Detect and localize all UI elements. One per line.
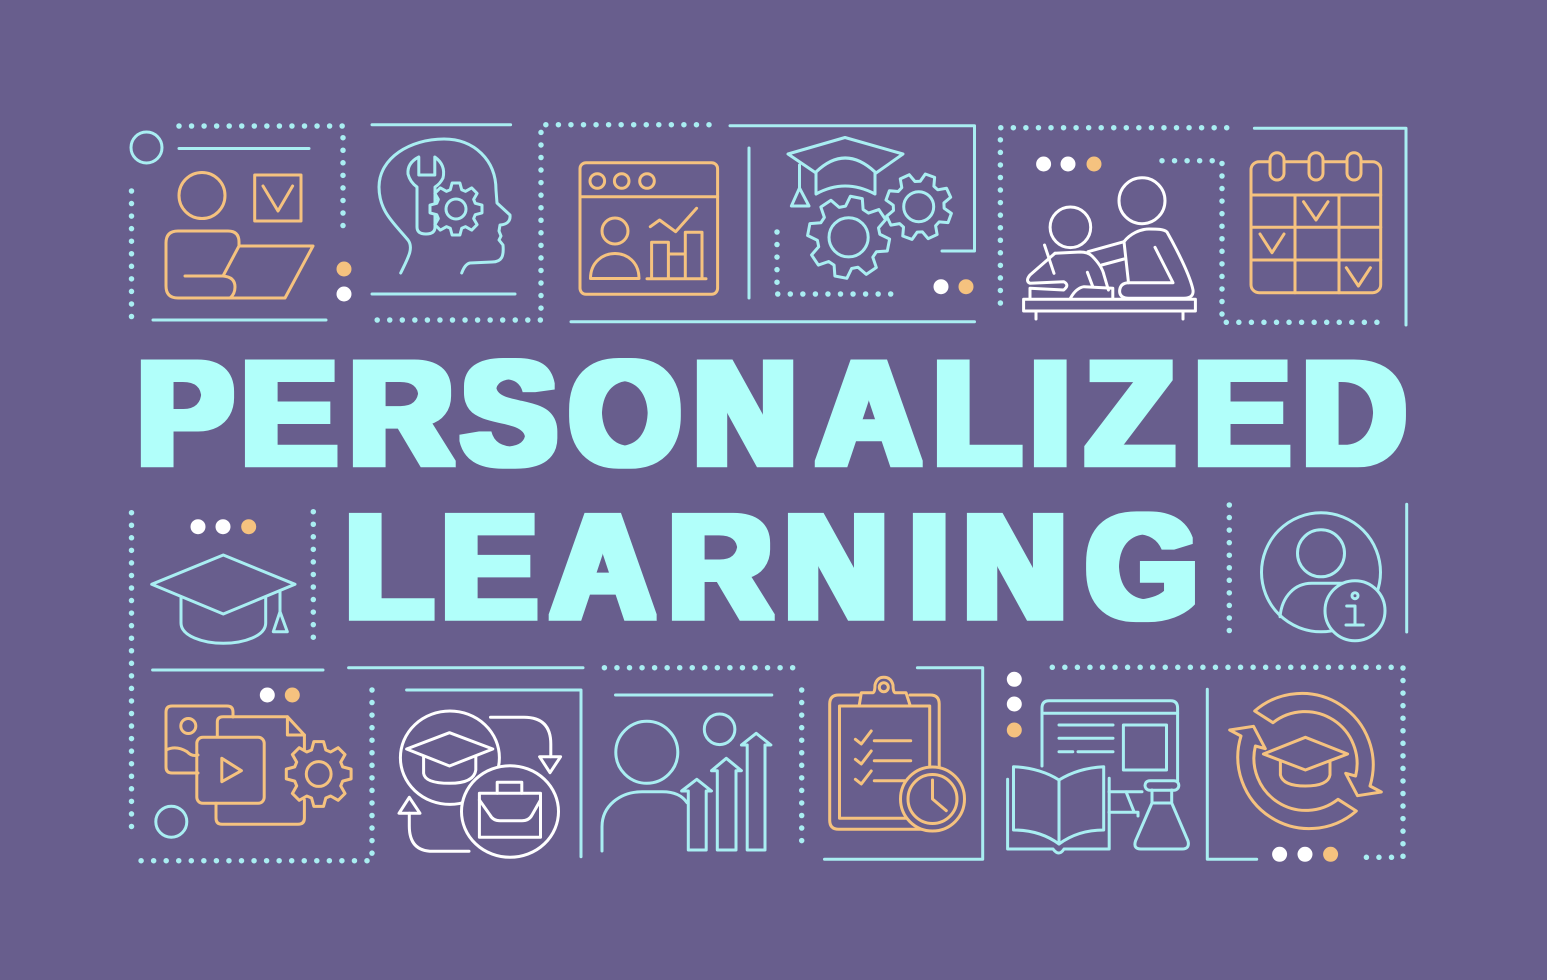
panel: cycle with graduation cap xyxy=(1052,667,1403,862)
panel: graduation cap with gears xyxy=(571,126,974,322)
icon: person with rising arrows xyxy=(602,714,771,851)
title xyxy=(137,330,1406,649)
panel: graduation cap left of title xyxy=(132,512,313,828)
title line 1: PERSONALIZED xyxy=(137,330,1406,496)
icon: student with laptop xyxy=(166,172,313,298)
icon: browser window with profile and chart xyxy=(580,163,718,294)
icon: cap and briefcase exchange xyxy=(399,711,561,857)
panel: user profile info xyxy=(1229,504,1407,641)
icon: calendar with checks xyxy=(1251,153,1381,293)
panel: dashboard window xyxy=(580,163,718,294)
panel: head with wrench and gear xyxy=(371,125,709,320)
icon: cap and gears xyxy=(788,138,961,285)
panel: calendar xyxy=(1251,128,1406,325)
panel: personal growth arrows xyxy=(602,668,803,851)
panel: tutor with student at desk xyxy=(1000,128,1381,322)
panel: study materials, book, monitor, flask xyxy=(1007,672,1188,853)
panel: media files with gear xyxy=(131,670,372,861)
icon: head with tools xyxy=(379,139,510,273)
icon: media files and gear xyxy=(166,706,351,824)
icon: user with info badge xyxy=(1262,513,1385,641)
icon: circular arrows with cap xyxy=(1230,693,1381,829)
icon: clipboard and clock xyxy=(830,677,964,831)
icon: tutor and student xyxy=(1024,178,1195,319)
icon: book, monitor and flask xyxy=(1008,701,1188,853)
panel: person at laptop with checkbox xyxy=(131,126,352,320)
panel: education to career cycle xyxy=(349,668,583,857)
title line 2: LEARNING xyxy=(345,484,1198,649)
panel: clipboard checklist with clock xyxy=(824,668,983,859)
icon: graduation cap xyxy=(152,555,295,643)
